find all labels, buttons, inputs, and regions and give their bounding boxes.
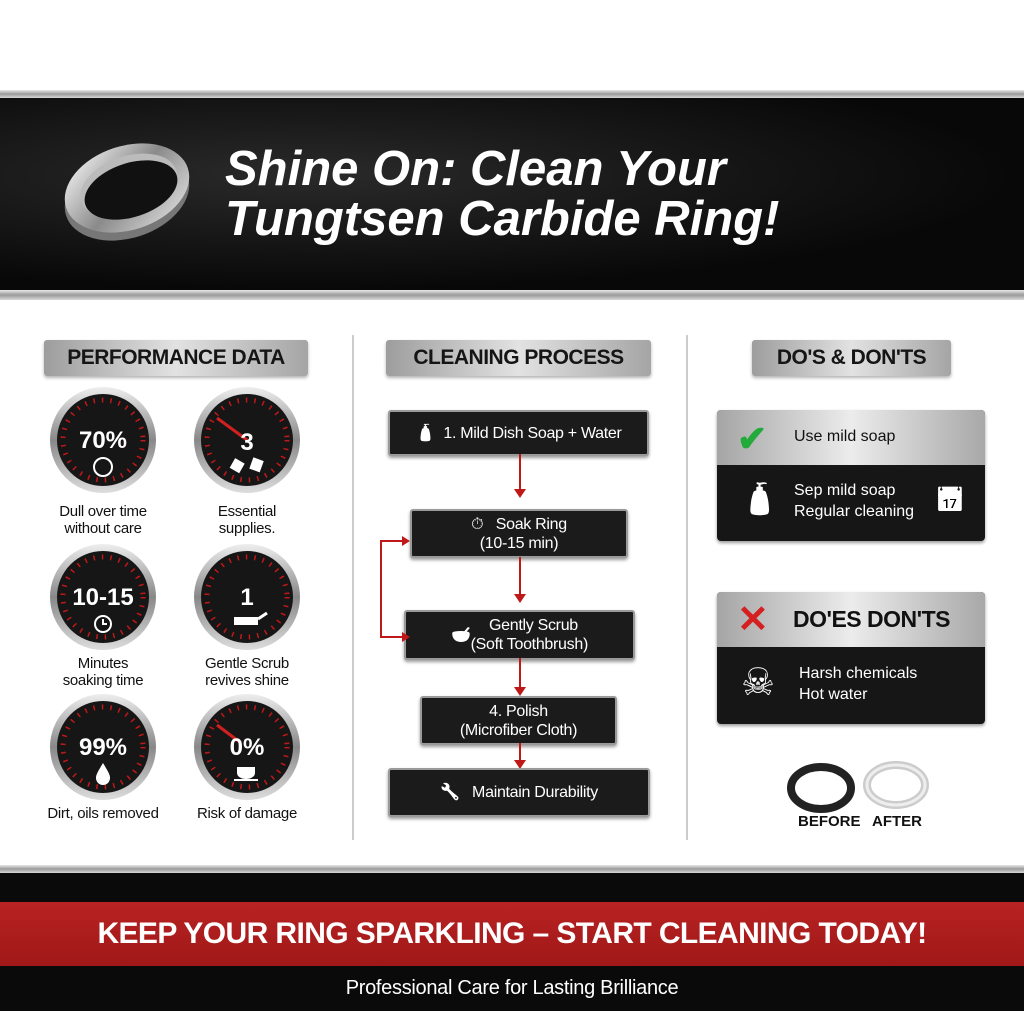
panel: performance data: revives shine — [205, 672, 289, 689]
step 4 — [420, 696, 617, 745]
gauges: 3 — [240, 429, 254, 456]
panel: performance data: Gentle Scrub — [205, 655, 289, 672]
do card: Sep mild soap — [794, 482, 895, 499]
panel: performance data: Dirt, oils removed — [47, 805, 159, 822]
panel: dos and donts: AFTER — [872, 813, 922, 830]
footer — [0, 865, 1024, 1011]
step 1 — [388, 410, 649, 456]
do card: 🧴 — [741, 483, 778, 516]
do card — [717, 410, 985, 541]
step 2: (10-15 min) — [480, 534, 558, 552]
panel: performance data: soaking time — [63, 672, 143, 689]
gauges: 10-15 — [72, 584, 134, 611]
gauges: 0% — [230, 734, 264, 761]
heading: DO'S & DON'TS — [777, 346, 926, 369]
step 5: Maintain Durability — [472, 784, 598, 801]
cta banner: KEEP YOUR RING SPARKLING – START CLEANING TODAY! — [97, 917, 927, 950]
cta banner — [0, 902, 1024, 966]
icon: ring — [64, 143, 190, 241]
panel: cleaning process — [380, 340, 653, 821]
gauges: 70% — [79, 427, 127, 454]
labels — [59, 503, 147, 537]
gauges — [50, 387, 300, 800]
do card: Use mild soap — [794, 428, 895, 445]
gauges: 1 — [240, 584, 254, 611]
title: Shine On: Clean Your — [225, 142, 726, 196]
step 5: 🔧 — [440, 784, 460, 801]
subtitle — [0, 966, 1024, 1011]
panel: performance data — [42, 340, 310, 822]
panel: dos and donts — [715, 340, 987, 830]
step 3: (Soft Toothbrush) — [471, 636, 588, 653]
step 2: ⏱ Soak Ring — [471, 516, 567, 532]
panel: performance data: Minutes — [78, 655, 128, 672]
heading — [386, 340, 651, 376]
step 4: (Microfiber Cloth) — [460, 722, 577, 738]
dont card: Harsh chemicals — [799, 665, 917, 682]
do card: Regular cleaning — [794, 503, 914, 520]
title: Tungtsen Carbide Ring! — [225, 192, 779, 246]
step 1: 1. Mild Dish Soap + Water — [443, 424, 622, 442]
dont card: Hot water — [799, 686, 867, 703]
icon: before after rings — [787, 761, 929, 813]
dont card: ✕ — [737, 599, 769, 641]
gauges: 99% — [79, 734, 127, 761]
step 3: Gently Scrub — [489, 617, 578, 634]
step 1: 🧴 — [415, 424, 435, 442]
labels: without care — [64, 520, 142, 537]
panel: dos and donts: BEFORE — [798, 813, 861, 830]
dont card — [717, 592, 985, 724]
labels: Dull over time — [59, 503, 147, 520]
panel: performance data: supplies. — [219, 520, 275, 537]
step 3 — [404, 610, 635, 660]
heading: PERFORMANCE DATA — [67, 346, 285, 369]
heading — [752, 340, 951, 376]
title — [225, 142, 779, 246]
dont card: ☠ — [741, 662, 775, 704]
panel: performance data: Risk of damage — [197, 805, 297, 822]
arrow: loop — [380, 536, 410, 642]
step 3: 🥣 — [451, 626, 471, 644]
header band — [0, 90, 1024, 300]
step 5 — [388, 768, 650, 817]
subtitle: Professional Care for Lasting Brilliance — [346, 977, 678, 999]
heading: CLEANING PROCESS — [413, 346, 624, 369]
do card: 📅 — [935, 487, 965, 514]
do card: ✔ — [737, 418, 767, 459]
dont card: DO'ES DON'TS — [793, 606, 950, 632]
heading — [44, 340, 308, 376]
panel: performance data: Essential — [218, 503, 276, 520]
step 2 — [410, 509, 628, 558]
step 4: 4. Polish — [489, 702, 548, 720]
